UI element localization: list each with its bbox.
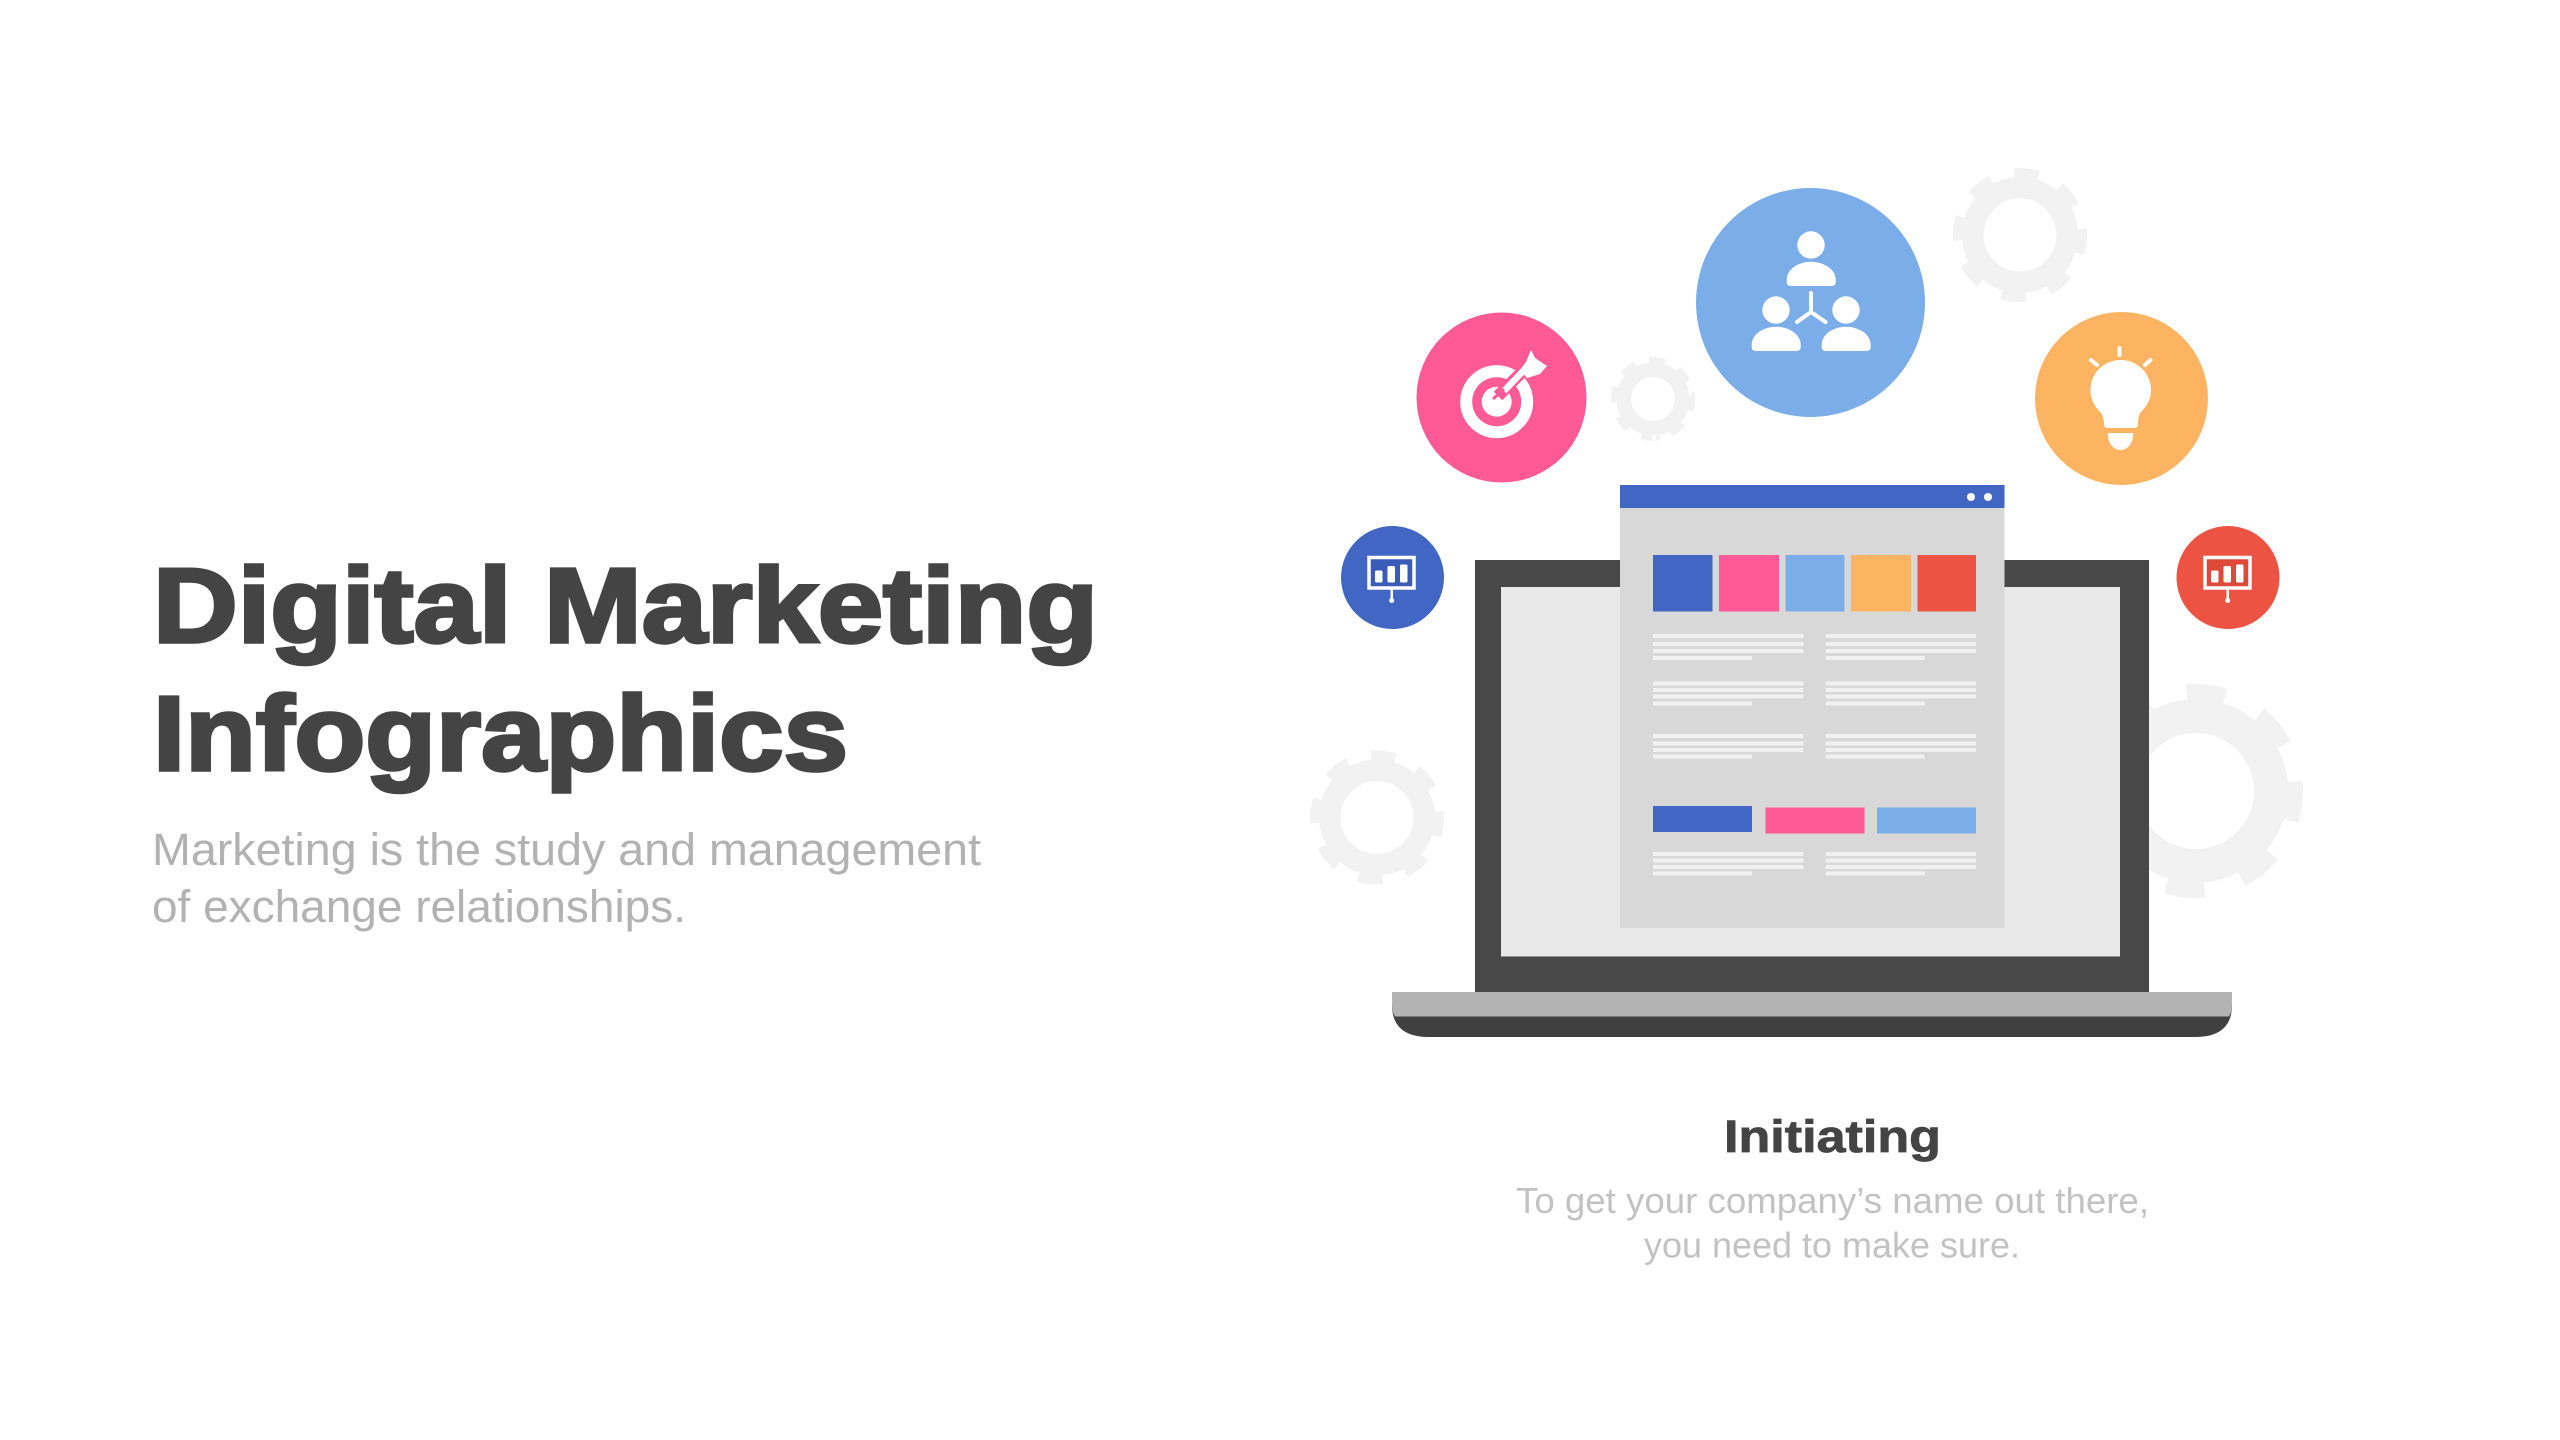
title — [153, 547, 1098, 793]
window title bar — [1620, 485, 2004, 508]
window control dots — [1967, 493, 1992, 501]
icon: lightbulb in orange circle — [2035, 312, 2208, 485]
window body — [1620, 485, 2004, 928]
laptop base underside — [1392, 1000, 2232, 1037]
title: Digital Marketing — [153, 547, 1098, 665]
laptop screen — [1501, 587, 2120, 956]
decorative gear: small centre — [1612, 358, 1694, 440]
icon: target in pink circle — [1416, 312, 1586, 482]
browser window panel — [1620, 485, 2004, 928]
colour bars row — [1653, 806, 1976, 834]
icon: presentation board in blue circle — [1341, 526, 1444, 629]
caption text: To get your company’s name out there, — [1516, 1180, 2149, 1221]
subtitle text: Marketing is the study and management — [152, 824, 982, 875]
icon: presentation board in red circle — [2176, 526, 2280, 629]
laptop — [1392, 560, 2232, 1037]
decorative gear: left — [1311, 752, 1443, 883]
colour swatches row — [1653, 555, 1976, 612]
caption text — [1516, 1180, 2149, 1266]
icon: people network in blue circle — [1696, 188, 1925, 417]
decorative gear: right, behind laptop — [2091, 686, 2301, 896]
placeholder text lines — [1653, 634, 1976, 876]
caption text: you need to make sure. — [1644, 1224, 2020, 1266]
laptop bezel — [1475, 560, 2149, 993]
subtitle text: of exchange relationships. — [152, 881, 686, 932]
heading: Initiating: Initiating — [1724, 1111, 1941, 1162]
title: Infographics — [153, 675, 848, 793]
laptop base top — [1392, 992, 2232, 1016]
decorative gear: top right — [1954, 169, 2086, 301]
subtitle text — [152, 824, 982, 932]
